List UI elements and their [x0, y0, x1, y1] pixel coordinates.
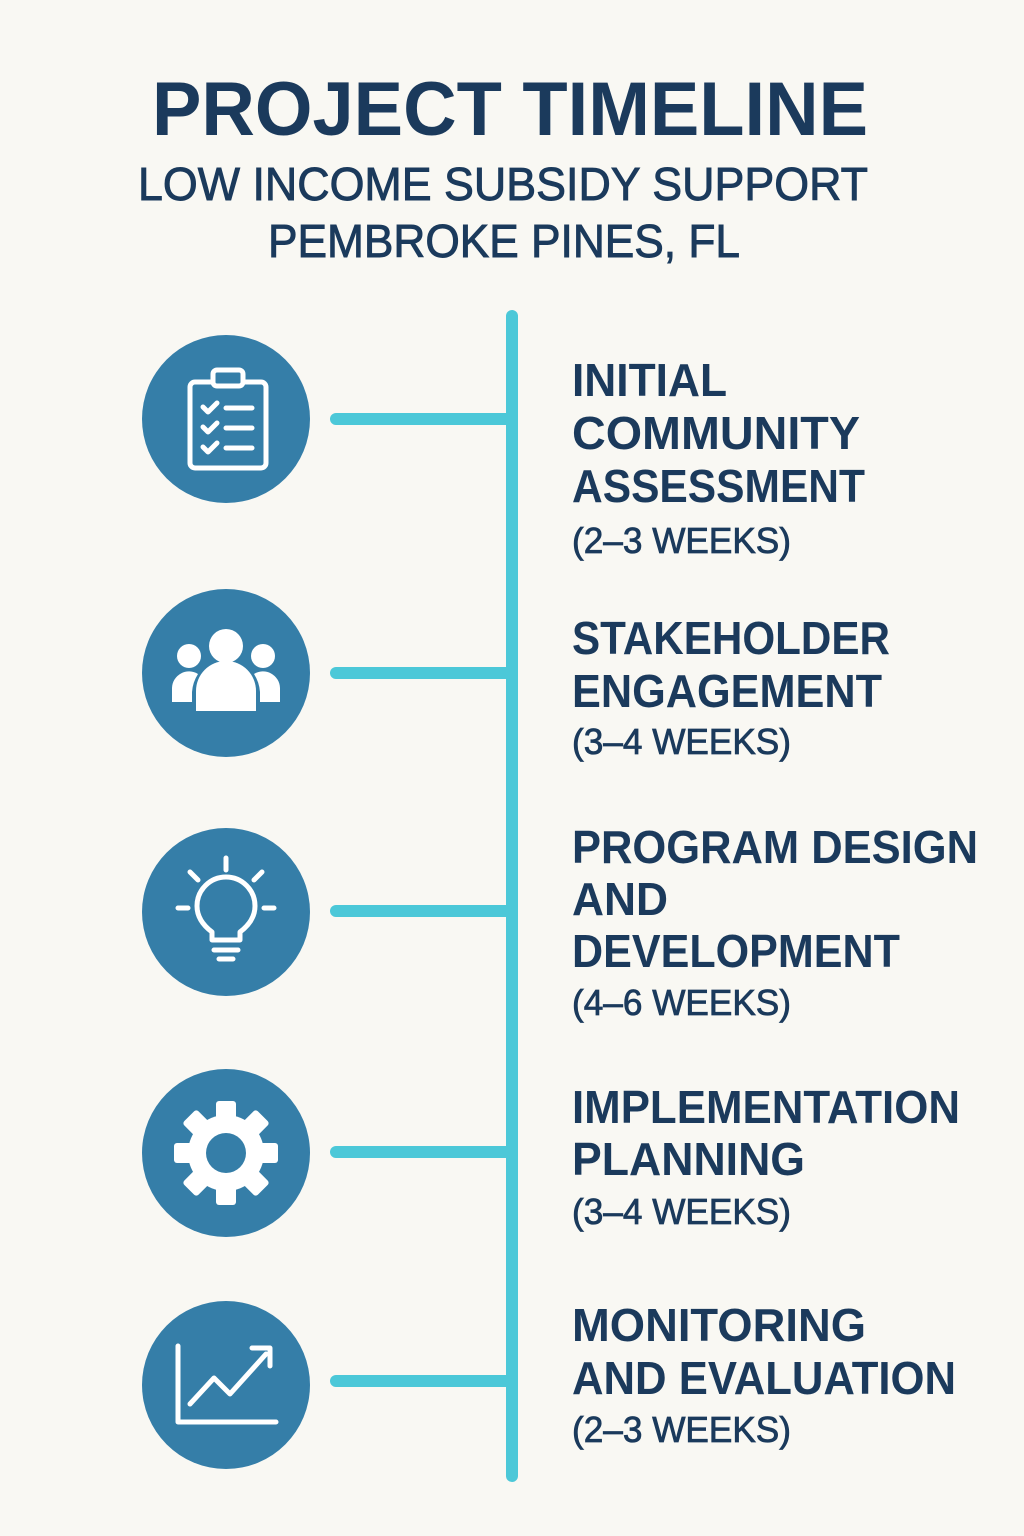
step 1 text: ASSESSMENT	[572, 460, 865, 512]
step 5 text	[572, 1299, 956, 1450]
step 3 text: (4–6 WEEKS)	[572, 982, 791, 1023]
subtitle: PEMBROKE PINES, FL	[268, 215, 740, 267]
icon: people	[142, 589, 310, 757]
step 3 text: DEVELOPMENT	[572, 925, 900, 977]
step 5 text: (2–3 WEEKS)	[572, 1409, 791, 1450]
step 1 text: INITIAL	[572, 354, 727, 406]
step 4 text: PLANNING	[572, 1133, 805, 1185]
step 2 text	[572, 612, 890, 762]
step 1 text: COMMUNITY	[572, 407, 860, 459]
step 4 text: IMPLEMENTATION	[572, 1081, 960, 1133]
step 2 text: (3–4 WEEKS)	[572, 721, 791, 762]
step 1 text: (2–3 WEEKS)	[572, 520, 791, 561]
subtitle	[138, 158, 868, 267]
icon: clipboard	[142, 335, 310, 503]
icon: growth chart	[142, 1301, 310, 1469]
step 2 text: ENGAGEMENT	[572, 665, 882, 717]
connectors	[336, 419, 506, 1381]
timeline vertical line	[506, 316, 518, 1476]
title: PROJECT TIMELINE	[152, 67, 868, 152]
step 4 text	[572, 1081, 960, 1232]
step 1 text	[572, 354, 865, 561]
step 3 text: AND	[572, 873, 668, 925]
step 5 text: AND EVALUATION	[572, 1352, 956, 1404]
step 4 text: (3–4 WEEKS)	[572, 1191, 791, 1232]
icon: lightbulb	[142, 828, 310, 996]
subtitle: LOW INCOME SUBSIDY SUPPORT	[138, 158, 868, 210]
step 3 text: PROGRAM DESIGN	[572, 821, 978, 873]
step 3 text	[572, 821, 978, 1023]
step 5 text: MONITORING	[572, 1299, 866, 1351]
icon: gear	[142, 1069, 310, 1237]
step 2 text: STAKEHOLDER	[572, 612, 890, 664]
